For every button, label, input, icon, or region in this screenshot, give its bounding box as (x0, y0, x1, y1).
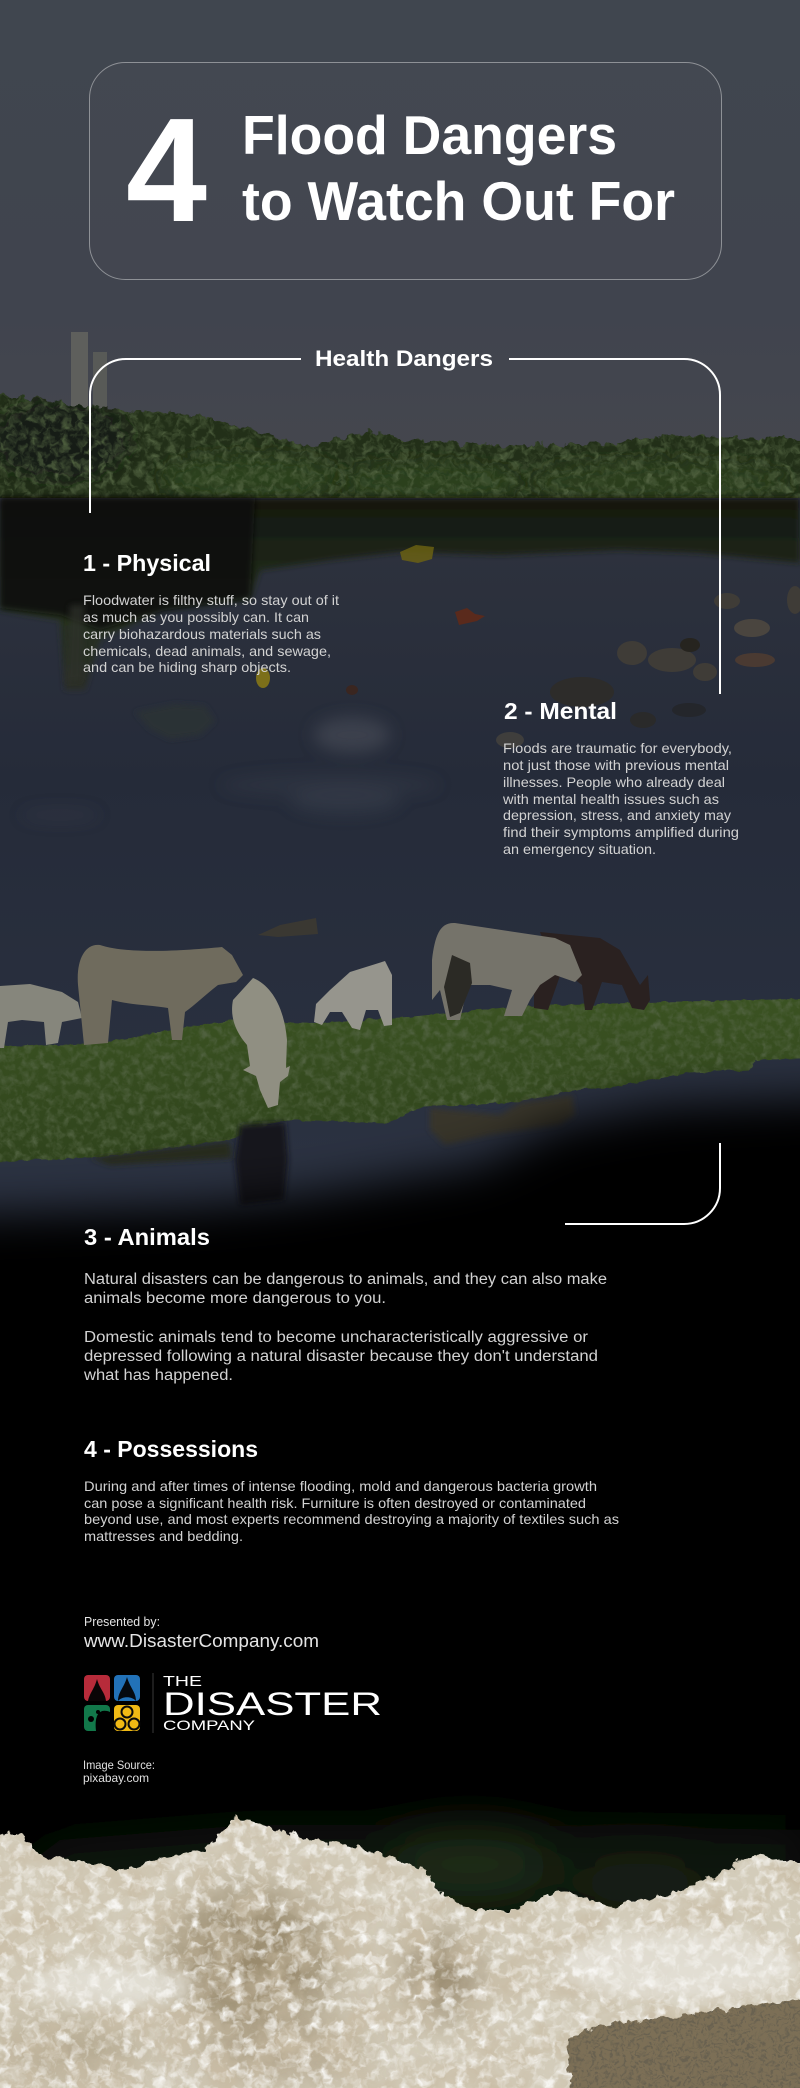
body text: beyond use, and most experts recommend destroying a majority of textiles such as (84, 1511, 619, 1527)
body text: and can be hiding sharp objects. (83, 659, 291, 675)
body text: chemicals, dead animals, and sewage, (83, 643, 331, 659)
body text: Natural disasters can be dangerous to animals, and they can also make (84, 1271, 607, 1288)
presented by: www.DisasterCompany.com (83, 1631, 319, 1651)
body text: animals become more dangerous to you. (84, 1290, 386, 1307)
item 1: Physical (83, 550, 339, 675)
icon: water (114, 1675, 140, 1701)
title text: to Watch Out For (242, 170, 675, 232)
body text: depressed following a natural disaster because they don't understand (84, 1348, 598, 1365)
drowned trunk reflection (66, 605, 84, 682)
body text: with mental health issues such as (502, 791, 719, 807)
body text: Floodwater is filthy stuff, so stay out of it (83, 592, 339, 608)
cow: far left (0, 984, 82, 1048)
image source: pixabay.com (83, 1771, 149, 1785)
body text: mattresses and bedding. (84, 1528, 243, 1544)
icon: fire (84, 1675, 110, 1701)
title box (90, 62, 722, 280)
item 2: Mental (502, 698, 739, 857)
cow reflections (90, 1095, 575, 1205)
body text: not just those with previous mental (503, 757, 729, 773)
cow: large left (78, 945, 243, 1045)
title text: Flood Dangers (242, 104, 617, 166)
debris in water (135, 545, 800, 748)
presented by: Presented by: (84, 1615, 160, 1629)
heading: 1 - Physical (83, 550, 211, 576)
body text: During and after times of intense flooding, mold and dangerous bacteria growth (84, 1478, 597, 1494)
frame: upper bracket left (90, 359, 301, 513)
logo wordmark: COMPANY (163, 1717, 256, 1733)
rock near cows (258, 918, 318, 937)
foam wave (0, 1810, 800, 2088)
grass bank (0, 990, 800, 1170)
cow: dark (534, 932, 650, 1010)
company logo (84, 1673, 382, 1733)
body text: an emergency situation. (503, 841, 656, 857)
body text: as much as you possibly can. It can (83, 609, 309, 625)
water (0, 498, 800, 1298)
black fade into dark section (0, 1095, 800, 1860)
heading: 2 - Mental (504, 698, 617, 724)
item 3: Animals (83, 1224, 607, 1384)
heading: 4 - Possessions (84, 1436, 258, 1462)
body text (84, 1478, 619, 1544)
icon: mold (84, 1705, 110, 1731)
dark foliage behind foam (0, 1824, 800, 1930)
body text: find their symptoms amplified during (503, 824, 739, 840)
cow: small calf (314, 961, 392, 1030)
logo divider (152, 1673, 154, 1733)
logo wordmark: THE (163, 1673, 202, 1690)
body text: what has happened. (83, 1367, 233, 1384)
body text: Domestic animals tend to become uncharacteristically aggressive or (84, 1329, 588, 1346)
logo wordmark: DISASTER (163, 1686, 382, 1722)
image source: Image Source: (83, 1758, 155, 1772)
water light patches (20, 717, 440, 822)
title numeral: 4 (126, 88, 207, 253)
body text: depression, stress, and anxiety may (503, 807, 731, 823)
body text (83, 592, 339, 675)
frame: upper bracket right (509, 359, 720, 694)
image source (83, 1758, 155, 1785)
sky (0, 0, 800, 510)
chimneys (0, 332, 107, 435)
cow: large white (432, 923, 582, 1020)
body text: can pose a significant health risk. Furniture is often destroyed or contaminated (84, 1495, 586, 1511)
cow: centre grazing (232, 978, 290, 1108)
title text (242, 104, 675, 232)
body text (502, 740, 739, 857)
body text (83, 1271, 607, 1384)
section heading: Health Dangers: Health Dangers (315, 346, 493, 371)
tree reflection (0, 498, 800, 690)
frame: lower bracket (565, 1143, 720, 1224)
body text: Floods are traumatic for everybody, (503, 740, 732, 756)
icon: biohazard (114, 1705, 140, 1731)
presented by (83, 1615, 319, 1651)
body text: illnesses. People who already deal (503, 774, 725, 790)
item 4: Possessions (84, 1436, 619, 1544)
heading: 3 - Animals (84, 1224, 210, 1250)
body text: carry biohazardous materials such as (83, 626, 321, 642)
tree line (0, 390, 800, 505)
logo wordmark (163, 1673, 382, 1733)
dark left reflection (0, 498, 255, 630)
